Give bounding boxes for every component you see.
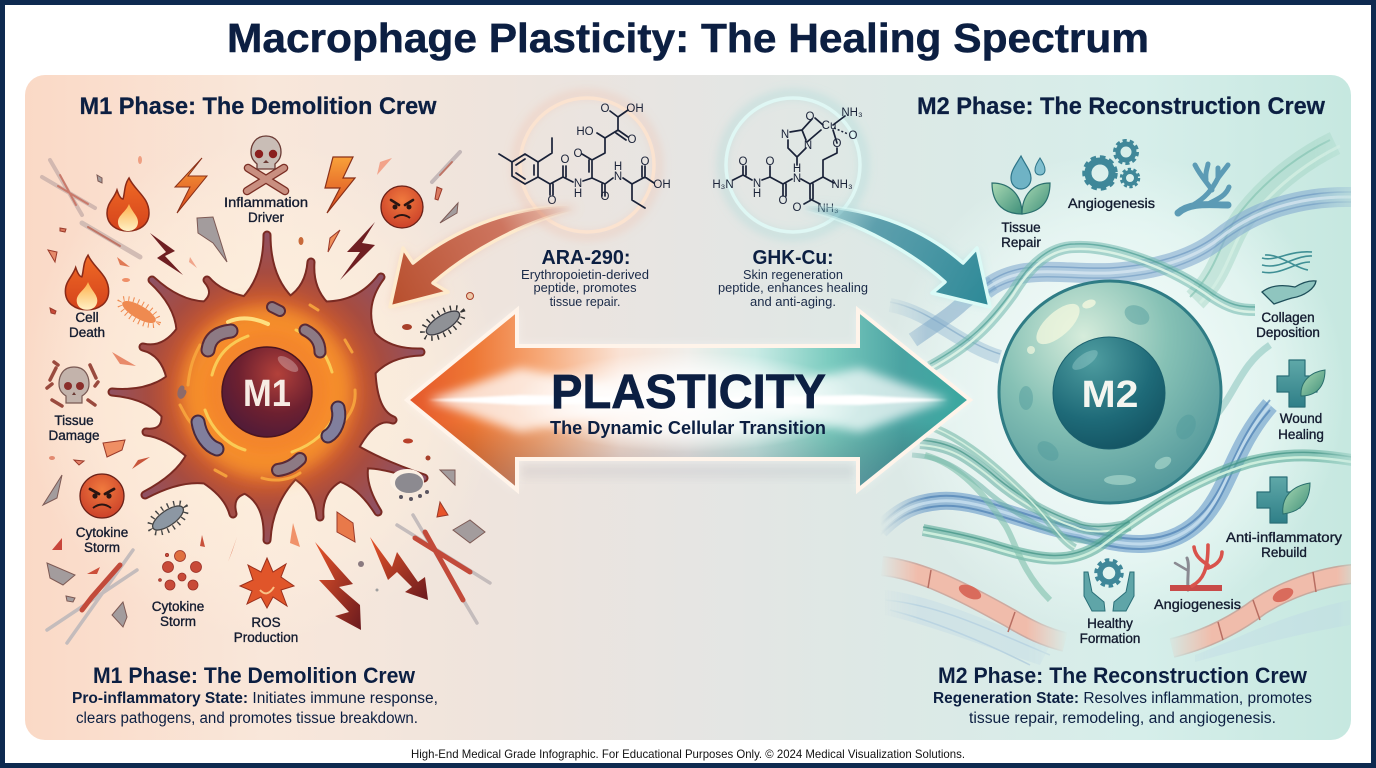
label: cell death <box>69 310 105 340</box>
icon: blue vessel branch <box>1178 164 1229 213</box>
label: healthy formation: Formation <box>1080 631 1140 646</box>
icon: lightning large lower 2 <box>370 537 428 600</box>
icon: gears <box>1084 140 1139 189</box>
label: tissue damage: Tissue <box>54 413 94 428</box>
label: cytokine storm centre: Storm <box>160 614 196 629</box>
label: wound healing: Healing <box>1278 427 1324 442</box>
structure: ARA-290 bonds: O <box>641 156 650 168</box>
structure: ARA-290 bonds: O <box>601 103 610 115</box>
structure: GHK-Cu bonds: H <box>753 188 761 200</box>
label: angiogenesis upper: Angiogenesis <box>1068 196 1155 211</box>
molecule: GHK-Cu <box>712 94 864 236</box>
highlight: M2 glossy reflection <box>1027 297 1097 354</box>
structure: GHK-Cu bonds <box>712 107 863 215</box>
structure: GHK-Cu bonds: N <box>804 140 812 152</box>
inner glow: bright ring around nucleus <box>195 320 339 464</box>
label: collagen deposition: Deposition <box>1256 325 1320 340</box>
label: cytokine storm centre <box>152 599 204 629</box>
caption: M1: M1 Phase: The Demolition Crew <box>93 663 416 688</box>
structure: ARA-290 bonds: O <box>601 191 610 203</box>
structure: ARA-290 bonds: O <box>574 148 583 160</box>
nucleus: M1: M1 <box>243 373 291 415</box>
text: ARA-290: Erythropoietin-derived <box>521 268 649 282</box>
highlight: arrow light rays <box>428 352 948 452</box>
label: collagen deposition <box>1256 310 1320 340</box>
label: tissue repair <box>1001 220 1041 250</box>
structure: GHK-Cu bonds: H₃N <box>712 179 734 191</box>
title: Macrophage Plasticity: The Healing Spectrum <box>227 15 1149 61</box>
text: GHK-Cu: Skin regeneration <box>743 268 843 282</box>
nucleus: M1 <box>222 347 312 437</box>
label: wound healing: Wound <box>1280 411 1322 426</box>
structure: GHK-Cu bonds: NH₃ <box>831 179 853 191</box>
icon: red vessel branch <box>1170 545 1222 590</box>
structure: ARA-290 bonds: N <box>614 171 622 183</box>
organelles: M2 vacuoles <box>1019 301 1200 485</box>
label: inflammation driver: Inflammation <box>224 195 308 210</box>
icon: skull tissue damage <box>47 362 98 406</box>
heading: M2 phase top: M2 Phase: The Reconstruction Crew <box>917 93 1325 120</box>
structure: GHK-Cu bonds: N <box>753 178 761 190</box>
icon: cross and leaf anti-inflammatory <box>1257 477 1310 523</box>
text: ARA-290 <box>521 247 649 309</box>
icon: lightning orange 1 <box>175 158 207 213</box>
structure: GHK-Cu bonds: O <box>779 195 788 207</box>
text: GHK-Cu: peptide, enhances healing <box>718 281 868 295</box>
M2 cell <box>999 281 1221 503</box>
label: tissue repair: Repair <box>1001 235 1041 250</box>
caption: M1 <box>72 663 438 727</box>
icon: angry face cytokine storm <box>80 474 124 518</box>
structure: GHK-Cu bonds: NH₃ <box>817 203 839 215</box>
structure: GHK-Cu bonds: H <box>793 163 801 175</box>
icon: hands and gear <box>1084 560 1134 611</box>
label: cell death: Cell <box>75 310 99 325</box>
structure: GHK-Cu bonds: O <box>793 202 802 214</box>
structure: ARA-290 bonds: H <box>574 188 582 200</box>
muscle tissue: endothelial cells bottom left <box>882 566 1065 665</box>
label: inflammation driver: Driver <box>248 210 285 225</box>
structure: GHK-Cu bonds: O <box>766 156 775 168</box>
label: ROS production: Production <box>234 630 298 645</box>
molecule: ARA-290 <box>499 94 671 236</box>
heading: M1 phase top: M1 Phase: The Demolition Crew <box>80 93 437 120</box>
structure: ARA-290 bonds: HO <box>576 126 594 138</box>
icon: angry face upper <box>381 186 423 228</box>
arrow: ARA-290 to M1 <box>390 206 575 307</box>
label: tissue repair: Tissue <box>1001 220 1041 235</box>
label: tissue damage <box>48 413 100 443</box>
icon: cross and leaf wound healing <box>1277 360 1325 407</box>
icon: flame <box>107 178 149 231</box>
caption: M2 <box>933 663 1312 727</box>
nucleus: M2: M2 <box>1082 374 1138 416</box>
label: healthy formation <box>1080 616 1140 646</box>
footer: High-End Medical Grade Infographic. For Educational Purposes Only. © 2024 Medical Visualization Solutions. <box>411 747 965 761</box>
bacterium: grey lower <box>144 497 192 539</box>
arrow: plasticity double arrow <box>407 310 970 490</box>
label: collagen deposition: Collagen <box>1261 310 1315 325</box>
label: ROS production <box>234 615 298 645</box>
structure: GHK-Cu bonds: NH₃ <box>841 107 863 119</box>
fibers: torn tissue lower right <box>397 515 490 623</box>
inner swirls: glowing cytoplasm <box>180 305 355 480</box>
text: ARA-290: tissue repair. <box>550 295 620 309</box>
muscle tissue: endothelial cells bottom right <box>1172 572 1352 662</box>
text: arrow subtitle: The Dynamic Cellular Transition <box>550 417 826 438</box>
structure: GHK-Cu bonds: N <box>781 129 789 141</box>
icon: flame cell death <box>65 255 109 310</box>
label: cytokine storm left: Cytokine <box>76 525 128 540</box>
bacterium: orange <box>115 293 163 331</box>
text: GHK-Cu: and anti-aging. <box>750 295 836 309</box>
nucleus: M2 <box>1053 337 1165 449</box>
caption: M1: clears pathogens, and promotes tissue breakdown. <box>76 710 418 727</box>
bacterium: grey upper right <box>418 301 468 345</box>
caption: M2: M2 Phase: The Reconstruction Crew <box>938 663 1308 688</box>
structure: ARA-290 bonds: OH <box>626 103 644 115</box>
icon: skull and crossbones <box>247 136 285 191</box>
caption: M2: Regeneration State: Resolves inflammation, promotes <box>933 690 1312 707</box>
icon: lightning dark 2 <box>340 222 375 280</box>
arrow: GHK-Cu to M2 <box>805 206 990 307</box>
structure: GHK-Cu bonds: O <box>739 156 748 168</box>
debris: shards and fragments M1 <box>43 156 485 627</box>
label: healthy formation: Healthy <box>1087 616 1133 631</box>
structure: ARA-290 bonds: O <box>628 134 637 146</box>
structure: GHK-Cu bonds: O <box>849 130 858 142</box>
label: tissue damage: Damage <box>48 428 100 443</box>
icon: lightning dark 1 <box>150 233 183 275</box>
icon: lightning large lower 1 <box>315 542 361 630</box>
label: cytokine storm left <box>76 525 128 555</box>
label: anti-inflammatory rebuild <box>1226 530 1342 560</box>
structure: ARA-290 bonds <box>499 103 671 208</box>
text: ARA-290: peptide, promotes <box>534 281 636 295</box>
damage: torn membrane <box>390 469 429 501</box>
M1 cell <box>112 235 429 540</box>
icon: cytokine dots <box>159 550 202 590</box>
label: wound healing <box>1278 411 1324 442</box>
fibers: torn tissue upper left <box>42 152 460 257</box>
fibers: extracellular matrix around M2 <box>880 140 1352 600</box>
label: cell death: Death <box>69 325 105 340</box>
structure: ARA-290 bonds: H <box>614 161 622 173</box>
caption: M1: Pro-inflammatory State: Initiates immune response, <box>72 690 438 707</box>
structure: ARA-290 bonds: O <box>548 195 557 207</box>
label: cytokine storm centre: Cytokine <box>152 599 204 614</box>
structure: ARA-290 bonds: OH <box>653 179 671 191</box>
icon: tissue repair drops and leaves <box>992 156 1050 214</box>
text: PLASTICITY: PLASTICITY <box>551 366 826 419</box>
label: anti-inflammatory rebuild: Anti-inflammatory <box>1226 530 1342 545</box>
label: angiogenesis lower: Angiogenesis <box>1154 597 1241 612</box>
fibers: torn tissue lower left <box>47 550 137 643</box>
label: ROS production: ROS <box>251 615 281 630</box>
structure: GHK-Cu bonds: Cu <box>822 120 836 132</box>
label: inflammation driver <box>224 195 308 225</box>
organelles: engulfed bacteria in M1 <box>180 307 339 470</box>
icon: lightning orange 2 <box>325 157 355 213</box>
text: GHK-Cu <box>718 247 868 309</box>
structure: GHK-Cu bonds: N <box>793 173 801 185</box>
text: ARA-290: ARA-290: <box>542 247 630 269</box>
caption: M2: tissue repair, remodeling, and angiogenesis. <box>969 710 1276 727</box>
structure: ARA-290 bonds: N <box>574 178 582 190</box>
icon: collagen in hand <box>1262 252 1316 304</box>
label: cytokine storm left: Storm <box>84 540 120 555</box>
label: anti-inflammatory rebuild: Rebuild <box>1261 545 1307 560</box>
text: GHK-Cu: GHK-Cu: <box>752 247 834 269</box>
structure: GHK-Cu bonds: O <box>806 111 815 123</box>
icon: ROS starburst <box>240 558 294 608</box>
structure: GHK-Cu bonds: O <box>833 138 842 150</box>
structure: ARA-290 bonds: O <box>561 154 570 166</box>
